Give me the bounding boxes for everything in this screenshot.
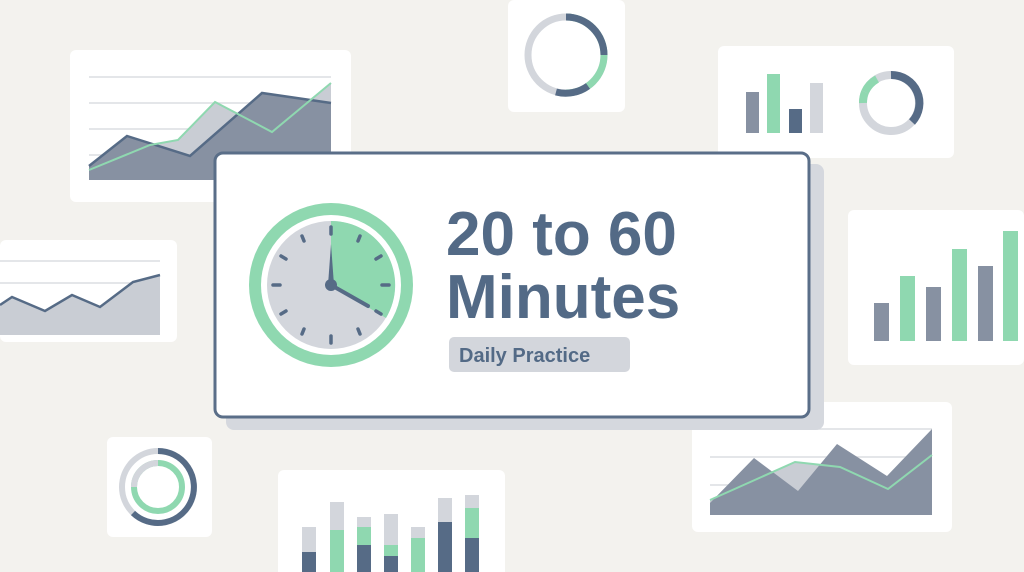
panel: bottom-left donut bbox=[107, 437, 212, 537]
panel: top-left area chart bbox=[70, 50, 351, 202]
title: 20 to 60 bbox=[446, 200, 677, 269]
main card bbox=[215, 153, 809, 417]
subtitle: Minutes bbox=[446, 263, 680, 332]
panel: bottom-right area chart bbox=[692, 402, 952, 532]
panel: right bar chart bbox=[848, 210, 1024, 365]
tag: daily practice: Daily Practice bbox=[459, 345, 590, 367]
panel: top-right bars and donut bbox=[718, 46, 954, 158]
panel: top donut bbox=[508, 0, 625, 112]
panel: bottom stacked bars bbox=[278, 470, 505, 572]
main card shadow bbox=[226, 164, 824, 430]
tag: daily practice bbox=[449, 337, 630, 372]
panel: left line chart bbox=[0, 240, 177, 342]
icon: clock bbox=[249, 203, 413, 367]
